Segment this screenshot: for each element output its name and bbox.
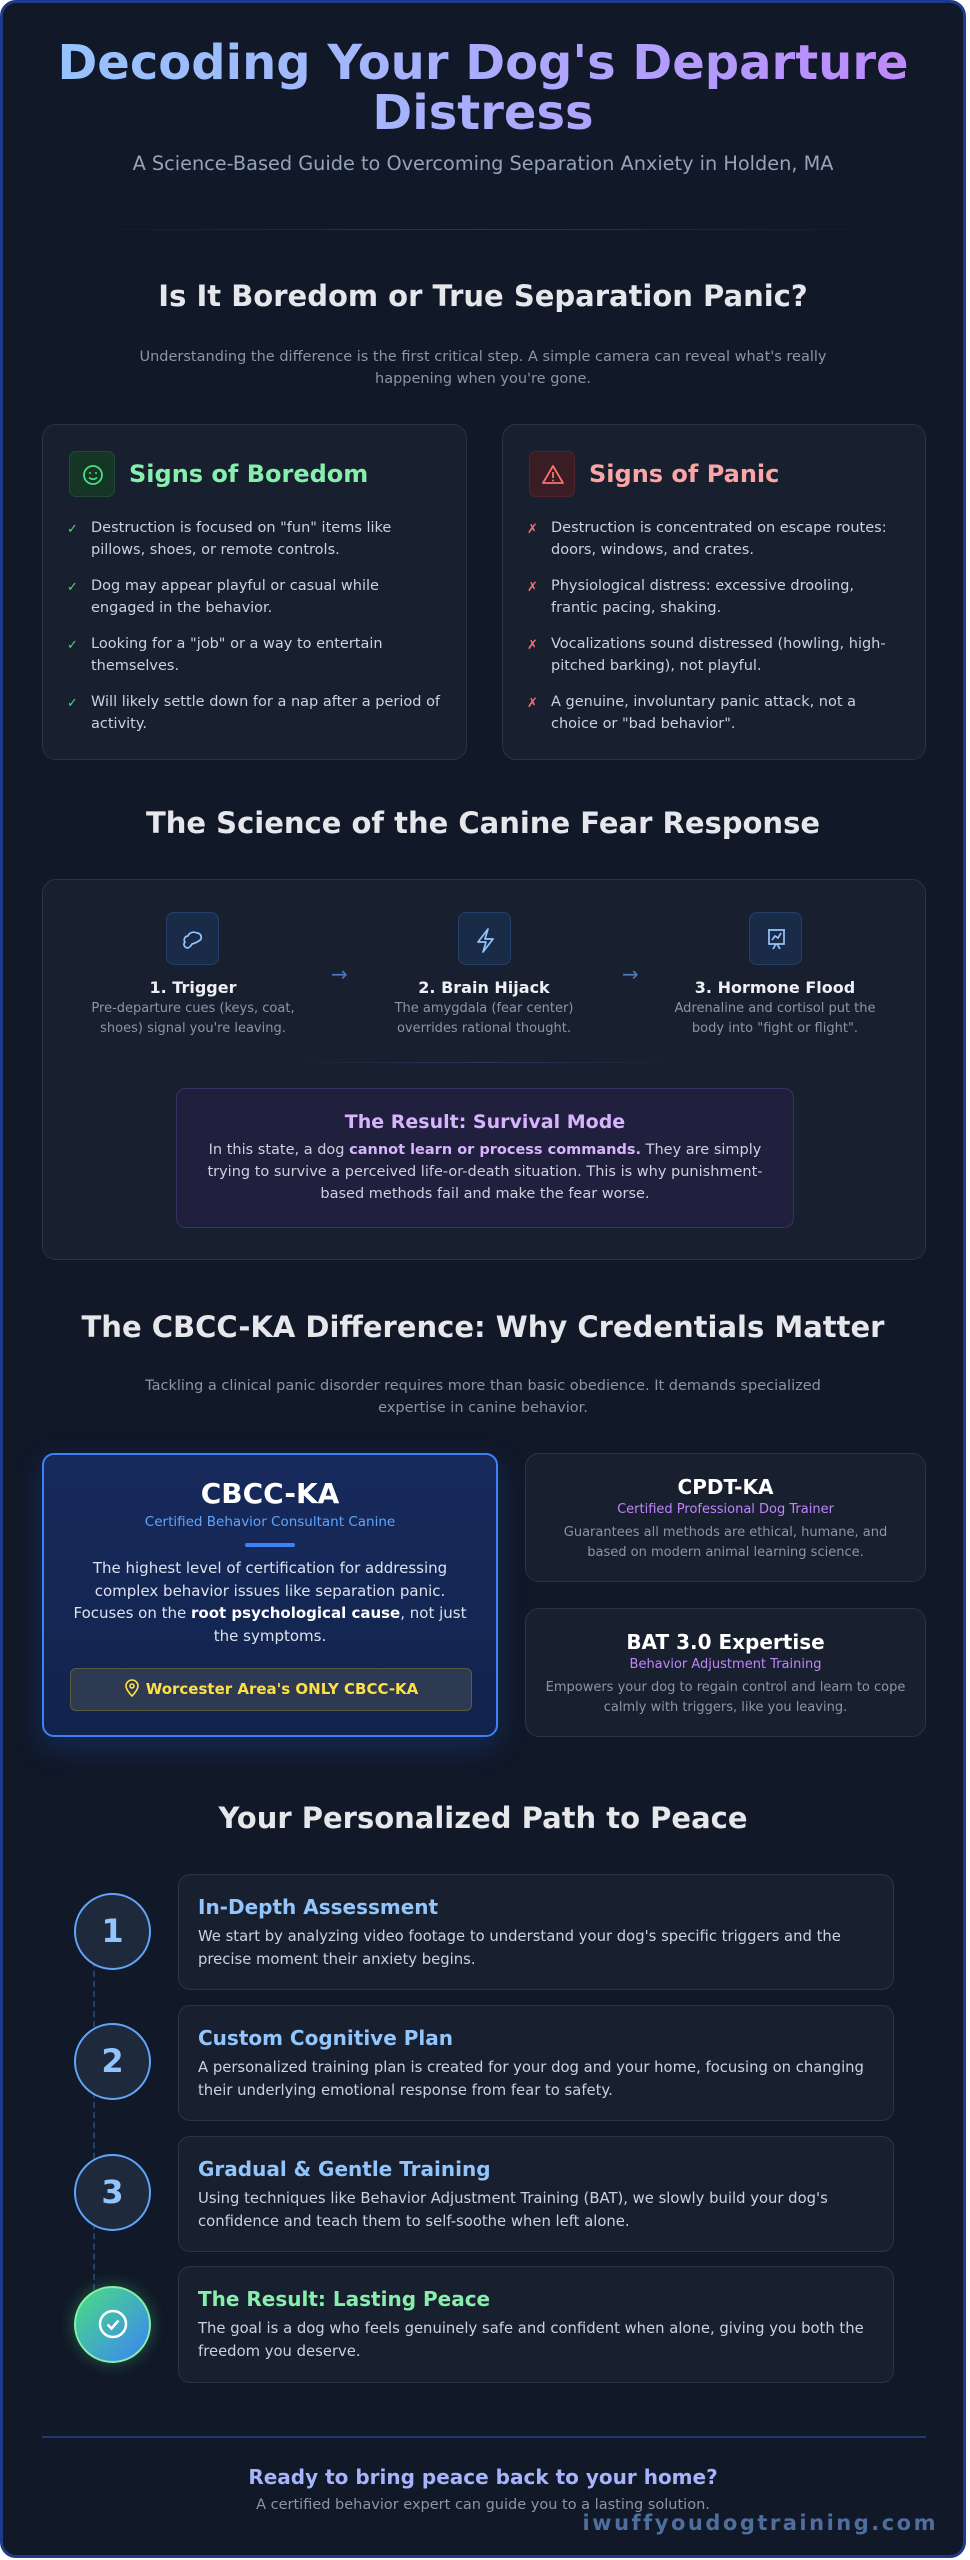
step 1: 1 [101, 1912, 124, 1950]
panel: panic: frantic pacing, shaking. [551, 600, 721, 616]
callout: survival mode: The Result: Survival Mode [345, 1111, 625, 1133]
panel: fear response [42, 879, 926, 1260]
bullets [67, 520, 391, 558]
panel: panic: ✗ [527, 696, 538, 711]
panel: boredom [42, 424, 467, 760]
heading: Signs of Boredom [129, 460, 368, 488]
panel: panic: Vocalizations sound distressed (howling, high- [551, 636, 886, 652]
card: CBCC-KA: CBCC-KA [201, 1477, 339, 1510]
panel: panic: ✗ [527, 638, 538, 653]
arrow: → [331, 962, 348, 986]
heading: fear response: The Science of the Canine Fear Response [146, 806, 820, 840]
step 2: 2. Brain Hijack [418, 978, 550, 997]
panel: boredom: ✓ [67, 638, 78, 653]
card: BAT 3.0: Behavior Adjustment Training [630, 1657, 821, 1672]
step 2: 2 [101, 2042, 124, 2080]
text: Using techniques like Behavior Adjustment Training (BAT), we slowly build your dog's confidence and teach them to self-soothe when left alone. [198, 2190, 828, 2230]
text: A personalized training plan is created for your dog and your home, focusing on changing their underlying emotional response from fear to safety. [198, 2059, 864, 2099]
step 4: result [74, 2286, 151, 2363]
badge [70, 1668, 472, 1711]
step 2 [74, 2023, 151, 2100]
text: Custom Cognitive Plan [198, 2026, 453, 2050]
panel: panic: Physiological distress: excessive drooling, [551, 578, 854, 594]
step 1: 1. Trigger [150, 978, 236, 997]
card: BAT 3.0 [525, 1608, 926, 1737]
step 1: Pre-departure cues (keys, coat, shoes) signal you're leaving. [91, 1001, 295, 1036]
card: CBCC-KA [42, 1453, 498, 1737]
panel: boredom: Dog may appear playful or casual while [91, 578, 379, 594]
step 3 [74, 2154, 151, 2231]
callout: survival mode: In this state, a dog cannot learn or process commands. They are simply trying to survive a perceived life-or-death situation. This is why punishment-based methods fail and make the fear worse. [207, 1142, 763, 1202]
card: CBCC-KA: Focuses on the root psychological cause, not just [74, 1604, 466, 1622]
timeline line [93, 1900, 95, 2300]
CTA text: A certified behavior expert can guide you to a lasting solution. [256, 2497, 710, 2513]
step 1 [91, 978, 295, 1036]
panel: panic: ✗ [527, 580, 538, 595]
title: Decoding Your Dog's Departure [57, 35, 909, 91]
card: CPDT-KA: Guarantees all methods are ethical, humane, and based on modern animal learning science. [564, 1525, 887, 1560]
title: Distress [372, 85, 594, 141]
text: We start by analyzing video footage to understand your dog's specific triggers and the precise moment their anxiety begins. [198, 1928, 841, 1968]
step 2 [394, 978, 573, 1036]
card: CBCC-KA: the symptoms. [214, 1626, 326, 1644]
bullets: Destruction is focused on "fun" items like [91, 520, 391, 536]
card: CPDT-KA: Certified Professional Dog Trainer [617, 1502, 834, 1517]
card: BAT 3.0: BAT 3.0 Expertise [626, 1630, 825, 1654]
panel: panic: A genuine, involuntary panic attack, not a [551, 694, 856, 710]
bullets: doors, windows, and crates. [551, 542, 754, 558]
step 1 [74, 1893, 151, 1970]
panel: boredom: ✓ [67, 580, 78, 595]
bullets: ✗ [527, 522, 538, 537]
panel: boredom: activity. [91, 716, 147, 732]
text: The goal is a dog who feels genuinely safe and confident when alone, giving you both the freedom you deserve. [198, 2320, 864, 2360]
bullets: pillows, shoes, or remote controls. [91, 542, 340, 558]
subtitle: A Science-Based Guide to Overcoming Separation Anxiety in Holden, MA [133, 152, 833, 175]
panel: boredom: ✓ [67, 696, 78, 711]
text: The Result: Lasting Peace [198, 2287, 490, 2311]
website url: iwuffyoudogtraining.com [582, 2511, 938, 2535]
card: CPDT-KA: CPDT-KA [678, 1475, 773, 1499]
heading: path to peace: Your Personalized Path to Peace [218, 1801, 748, 1835]
panel: panic: pitched barking), not playful. [551, 658, 762, 674]
bullets: Destruction is concentrated on escape routes: [551, 520, 887, 536]
heading: credentials: The CBCC-KA Difference: Why Credentials Matter [82, 1310, 884, 1344]
panel: boredom: Will likely settle down for a nap after a period of [91, 694, 440, 710]
step 3: 3 [101, 2173, 124, 2211]
callout: survival mode [176, 1088, 794, 1228]
title [0, 38, 966, 138]
badge: Worcester Area's ONLY CBCC-KA [146, 1680, 418, 1698]
text: In-Depth Assessment [198, 1895, 438, 1919]
card: CBCC-KA: Certified Behavior Consultant Canine [145, 1514, 395, 1530]
icon: brain [166, 912, 219, 965]
intro text: Understanding the difference is the first critical step. A simple camera can reveal what's really happening when you're gone. [139, 349, 826, 387]
panel: panic: choice or "bad behavior". [551, 716, 736, 732]
bullets: ✓ [67, 522, 78, 537]
step 3: Adrenaline and cortisol put the body into "fight or flight". [674, 1001, 876, 1036]
card: CBCC-KA: The highest level of certification for addressing [93, 1559, 447, 1577]
card: CPDT-KA [525, 1453, 926, 1582]
step 2: The amygdala (fear center) overrides rational thought. [395, 1001, 573, 1036]
panel: boredom: engaged in the behavior. [91, 600, 272, 616]
step 3: 3. Hormone Flood [695, 978, 855, 997]
icon: chart [749, 912, 802, 965]
step 3 [674, 978, 876, 1036]
bullets [527, 520, 887, 558]
panel: boredom: themselves. [91, 658, 179, 674]
icon: warning [529, 451, 575, 497]
arrow: → [622, 962, 639, 986]
panel: panic [502, 424, 926, 760]
text: Gradual & Gentle Training [198, 2157, 491, 2181]
heading: Signs of Panic [589, 460, 779, 488]
card: BAT 3.0: Empowers your dog to regain control and learn to cope calmly with triggers, like you leaving. [546, 1680, 905, 1715]
CTA heading: Ready to bring peace back to your home? [248, 2465, 718, 2489]
icon: smile [69, 451, 115, 497]
intro text: Tackling a clinical panic disorder requires more than basic obedience. It demands specialized expertise in canine behavior. [145, 1378, 821, 1416]
heading: boredom vs panic: Is It Boredom or True Separation Panic? [158, 279, 808, 313]
icon: bolt [458, 912, 511, 965]
card: CBCC-KA: complex behavior issues like separation panic. [95, 1582, 445, 1600]
panel: boredom: Looking for a "job" or a way to entertain [91, 636, 383, 652]
